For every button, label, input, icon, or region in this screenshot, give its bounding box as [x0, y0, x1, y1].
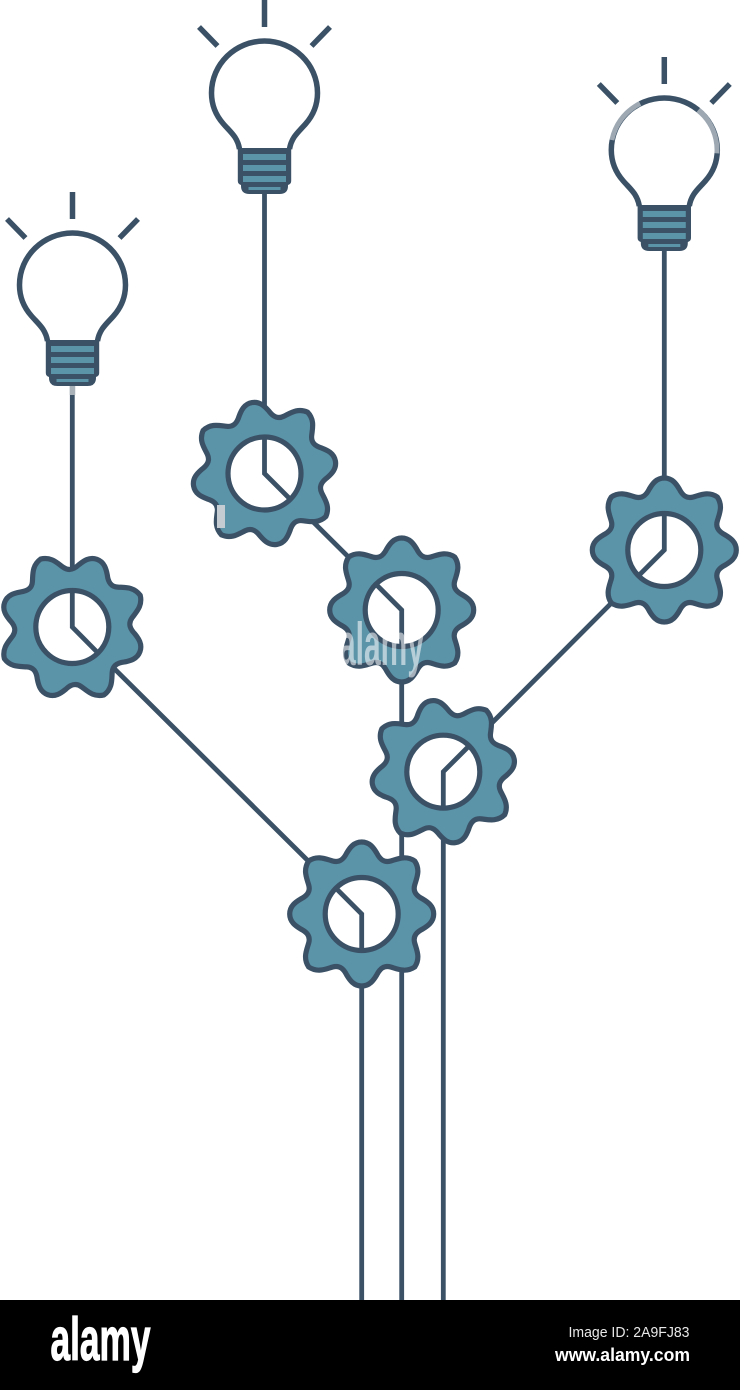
gear: left	[0, 535, 165, 719]
watermark on centre gear: alamy	[339, 611, 424, 678]
gear: upper middle	[181, 390, 348, 557]
connecting lines	[72, 192, 664, 1300]
gear: right	[592, 478, 736, 622]
image id: Image ID: 2A9FJ83	[568, 1324, 690, 1341]
website: www.alamy.com	[554, 1345, 690, 1365]
watermark fragments on bulbs	[72, 103, 717, 395]
gear: lower right	[360, 688, 527, 855]
gear: centre	[330, 538, 474, 682]
footer logo: alamy	[50, 1306, 151, 1373]
light bulb: right	[599, 57, 730, 251]
light bulb: middle	[199, 0, 330, 194]
footer bar	[0, 1300, 740, 1390]
gear: bottom	[290, 842, 434, 986]
watermark patch on upper middle gear	[217, 505, 225, 528]
light bulb: left	[7, 192, 138, 386]
